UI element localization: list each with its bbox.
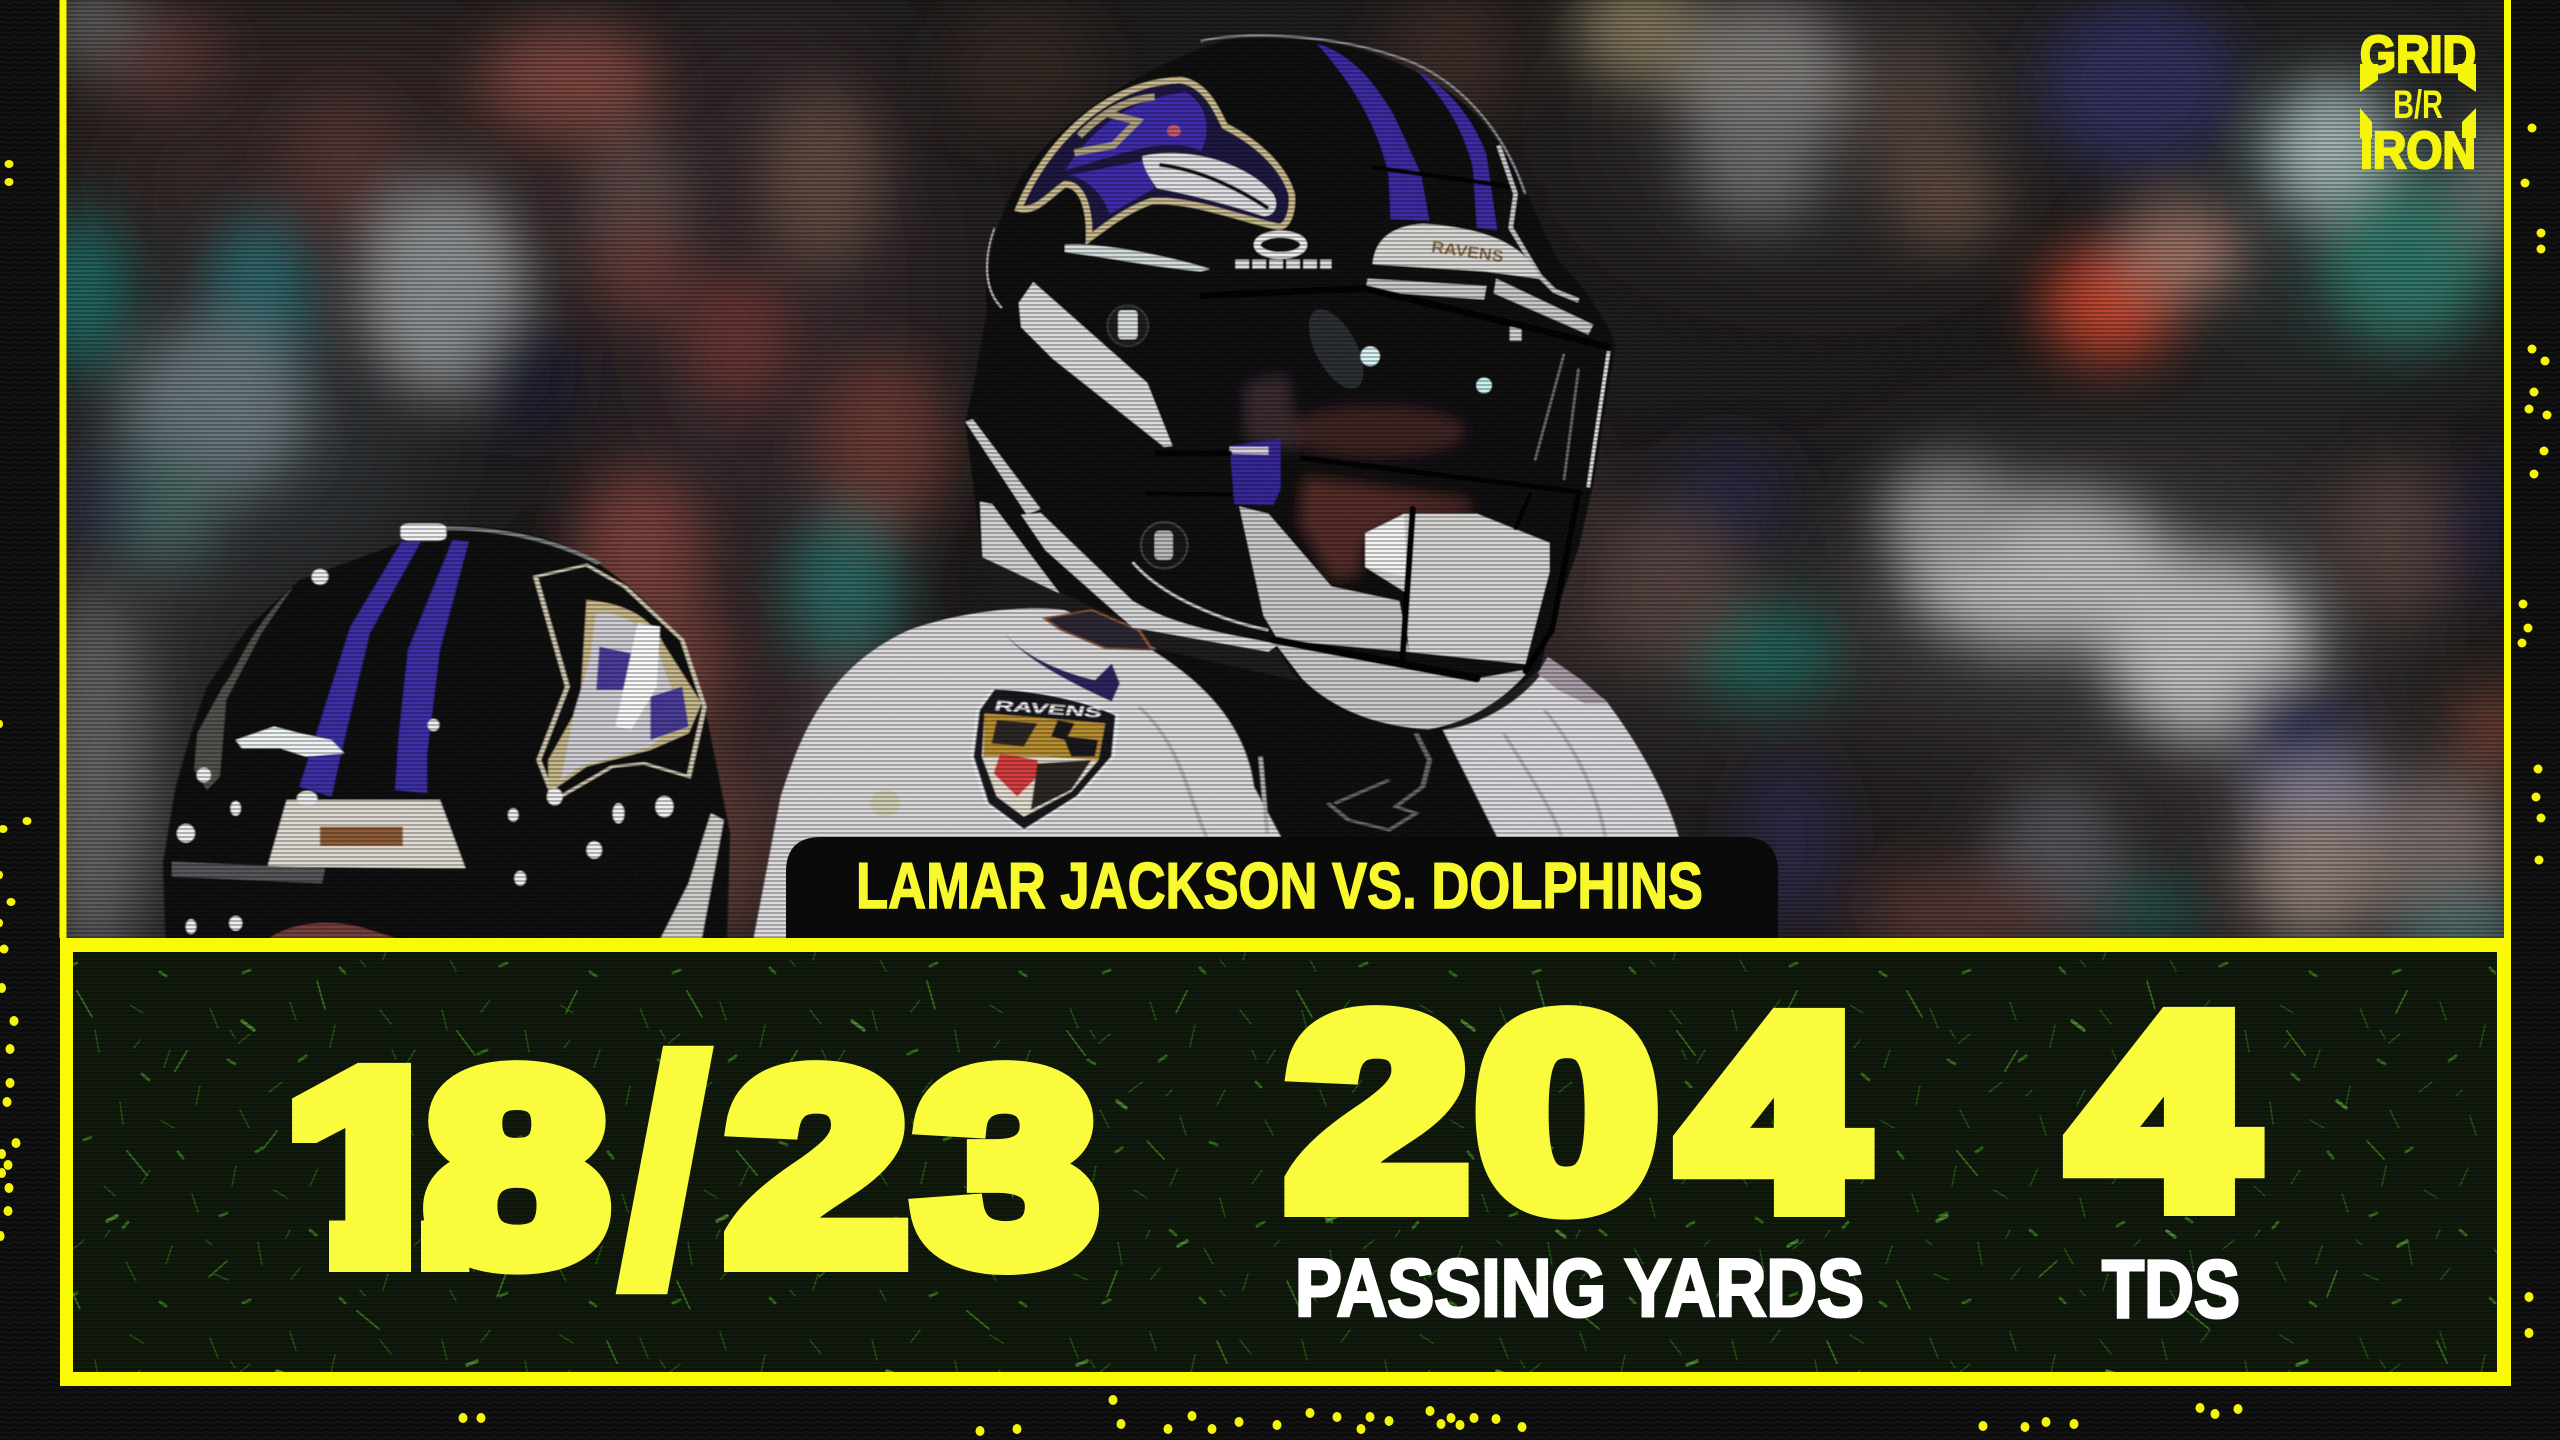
shoulder stripe patch [1538, 657, 1609, 703]
stripe separator seam [1373, 167, 1511, 187]
plate label [320, 827, 403, 846]
helmet white specks [177, 569, 673, 934]
banner text: LAMAR JACKSON VS. DOLPHINS [856, 849, 1703, 922]
main player jersey [754, 608, 1680, 938]
right shoulder [1443, 660, 1680, 938]
raven logo [536, 565, 705, 800]
helmet rear plate [268, 800, 465, 868]
slash: / [621, 996, 710, 1348]
ravens shield patch [972, 688, 1117, 831]
logo b/r mark: B/R [2393, 83, 2443, 127]
strap highlight [1230, 447, 1268, 455]
logo lower wedges [2360, 108, 2476, 138]
helmet brow band [172, 862, 325, 883]
yards number: 204 [1288, 961, 1864, 1262]
cheek white panel [1239, 507, 1409, 652]
jaw band [1021, 513, 1278, 652]
logo upper wedges [2360, 64, 2476, 92]
beak [1142, 153, 1276, 216]
gold b monogram [1074, 97, 1154, 153]
helmet shell [965, 34, 1615, 728]
chin cup [1273, 641, 1530, 729]
logo word iron: IRON [2360, 122, 2476, 180]
oakley logo [1235, 234, 1331, 264]
visor reflections [1298, 301, 1579, 480]
turf background [73, 952, 2497, 1372]
touchdowns label: TDS [2102, 1244, 2240, 1335]
turf scanlines [73, 952, 2497, 1372]
shell outline left [987, 228, 1002, 308]
stat: touchdowns [2072, 960, 2254, 1335]
beak divider [1159, 165, 1268, 208]
snap connector top [1107, 305, 1148, 346]
visor and face [1210, 303, 1603, 490]
smudge on shoulder [870, 790, 900, 817]
yellow frame around photo [63, 0, 2508, 938]
brow bar [1365, 279, 1593, 334]
back player helmet [163, 523, 730, 940]
grain over photo [66, 0, 2504, 938]
raven logo [1019, 80, 1292, 238]
logo word grid: GRID [2360, 26, 2476, 84]
stat: completions 18/23 [284, 996, 1096, 1348]
digits eighteen: 18 [284, 1016, 607, 1317]
photo panel: two players in front of a blurred crowd [20, 0, 2550, 990]
main player helmet [965, 34, 1615, 729]
stat panel [60, 938, 2511, 1386]
jersey fold shading [1139, 707, 1605, 837]
snap connector bottom [1141, 522, 1187, 569]
helmet crown bumper [400, 523, 446, 541]
facemask bars [1147, 288, 1608, 679]
stat: passing yards [1288, 961, 1864, 1334]
lower jaw line [1133, 562, 1268, 630]
yards label: PASSING YARDS [1295, 1243, 1864, 1334]
helmet shell [163, 526, 730, 940]
helmet top rim highlight [446, 528, 599, 563]
helmet side highlights [194, 587, 293, 790]
mouth guard bright face [1365, 515, 1407, 577]
bleacher report gridiron logo [2360, 26, 2476, 180]
purple strap [1230, 439, 1280, 505]
turf flecks [73, 952, 2497, 1372]
face skin below helmet [268, 923, 402, 940]
lower white side blades [965, 419, 1060, 594]
large soft crowd wash [20, 0, 2550, 990]
purple stripes [1317, 44, 1497, 230]
purple head [1065, 92, 1207, 214]
panel frame [60, 938, 2511, 1386]
photo base tone [66, 0, 2504, 938]
turf bright flecks [73, 952, 2497, 1372]
brow reflections [1065, 245, 1210, 271]
collar number patch [1044, 610, 1152, 650]
blurred crowd [38, 0, 2534, 970]
white brow bumper [1373, 224, 1540, 279]
upper white side panel [1019, 282, 1172, 447]
facemask side highlight [1588, 351, 1609, 487]
photo scanlines [66, 0, 2504, 938]
helmet right trim [660, 813, 724, 940]
left shoulder [754, 608, 1352, 938]
face skin in shadow [1244, 373, 1472, 582]
touchdowns number: 4 [2072, 960, 2254, 1261]
helmet purple stripes [300, 540, 469, 797]
red eye [1167, 125, 1181, 137]
patch wordmark: RAVENS [993, 698, 1104, 721]
helmet windscreen glare [236, 727, 344, 757]
shell top-rim highlight [1201, 36, 1525, 194]
swoosh [1005, 633, 1120, 702]
neck shadow [1146, 647, 1500, 938]
attempt digits: 23 [727, 1016, 1096, 1317]
banner background [786, 837, 1778, 938]
head with gold outline [1019, 80, 1292, 238]
bumper wordmark: RAVENS [1430, 238, 1505, 266]
mouth guard [1365, 514, 1549, 664]
right helmet chrome edge [1499, 145, 1579, 301]
name banner [786, 837, 1778, 938]
neck gaiter highlights [1328, 733, 1430, 830]
